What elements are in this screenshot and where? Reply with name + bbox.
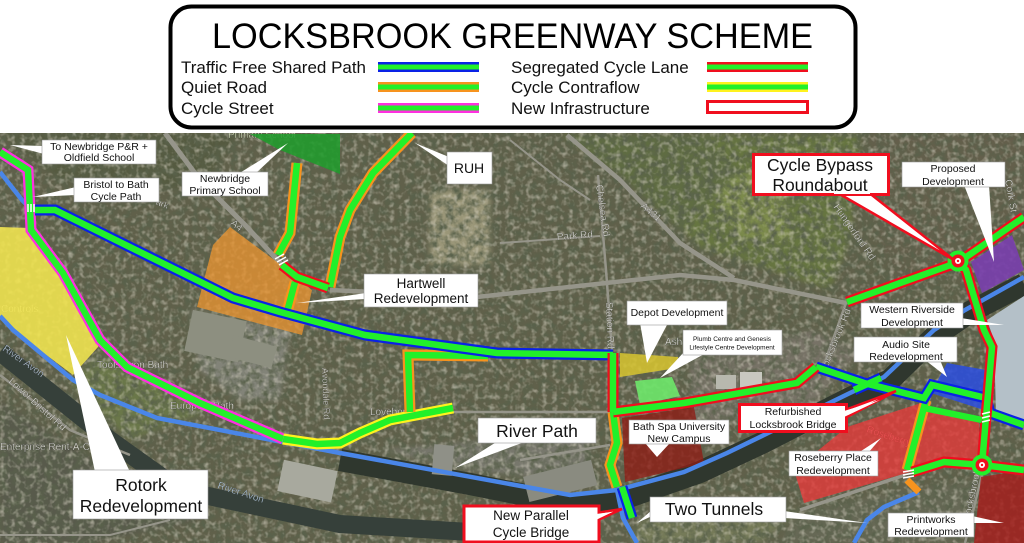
callout: Bristol to Bath Cycle Path: Bristol to Bath xyxy=(83,179,149,191)
callout: Hartwell Redevelopment xyxy=(297,274,478,307)
callout: New Parallel Cycle Bridge: New Parallel xyxy=(493,508,569,523)
legend: right column: Cycle Contraflow xyxy=(511,78,640,97)
callout: Rotork Redevelopment: Redevelopment xyxy=(80,496,202,516)
map place labels: Lymore Park xyxy=(119,183,170,211)
development site: Rotork xyxy=(0,227,100,375)
callout: Bath Spa University New Campus: Bath Spa University xyxy=(633,421,726,433)
callout: Plumb Centre and Genesis Lifestyle Centre Development xyxy=(660,330,782,378)
segregated cycle lane routes xyxy=(282,217,1024,472)
callout: Western Riverside Development xyxy=(861,303,1004,329)
legend: left column: Traffic Free Shared Path xyxy=(181,58,366,77)
callout: Roseberry Place Redevelopment xyxy=(789,438,881,477)
callout: Printworks Redevelopment xyxy=(888,513,1004,538)
map place labels: Toolstation Bath xyxy=(97,360,168,371)
callout: Proposed Development xyxy=(902,162,1005,262)
legend: right column: New Infrastructure xyxy=(511,99,650,118)
cycle contraflow route xyxy=(283,408,453,444)
callout: Printworks Redevelopment: Redevelopment xyxy=(894,526,968,538)
callout: New Parallel Cycle Bridge: Cycle Bridge xyxy=(493,525,569,540)
callout: Hartwell Redevelopment: Redevelopment xyxy=(374,291,469,306)
map place labels: River Avon xyxy=(216,480,265,506)
callout: Depot Development: Depot Development xyxy=(631,307,723,319)
map place labels: Controls xyxy=(1,304,38,315)
development site: Plumb Centre and Genesis xyxy=(635,377,680,405)
callout: Roseberry Place Redevelopment: Redevelopment xyxy=(796,465,870,477)
callout: Bristol to Bath Cycle Path: Cycle Path xyxy=(91,191,142,203)
quiet road routes xyxy=(278,133,926,492)
callout: Western Riverside Development: Development xyxy=(881,317,943,329)
map place labels: Locksbrook Rd xyxy=(962,453,987,521)
icon: cycle bypass roundabout south xyxy=(972,454,992,476)
callout: Proposed Development: Development xyxy=(922,176,984,188)
callout: Cycle Bypass Roundabout xyxy=(754,154,954,260)
development site: Bath Spa University xyxy=(622,407,704,482)
map place labels: River Avon xyxy=(0,343,46,380)
map place labels: Chelsea Rd xyxy=(593,184,611,237)
callout: Audio Site Redevelopment: Audio Site xyxy=(882,339,930,351)
callout: Refurbished Locksbrook Bridge xyxy=(740,391,896,432)
callout: Two Tunnels xyxy=(637,497,867,523)
header strip xyxy=(0,0,1024,133)
icon: cycle bypass roundabout north xyxy=(948,250,968,272)
callout: Cycle Bypass Roundabout: Roundabout xyxy=(772,175,868,195)
callout: Bath Spa University New Campus: New Campus xyxy=(647,433,711,445)
legend: right column xyxy=(511,58,808,118)
callout: Depot Development xyxy=(627,301,727,363)
legend: right column: Segregated Cycle Lane xyxy=(511,58,689,77)
callout: Two Tunnels: Two Tunnels xyxy=(665,499,763,519)
legend: left column: Cycle Street xyxy=(181,99,274,118)
legend: left column: Quiet Road xyxy=(181,78,267,97)
callout: Rotork Redevelopment xyxy=(66,335,208,519)
callout: Hartwell Redevelopment: Hartwell xyxy=(397,276,445,291)
callout: Proposed Development: Proposed xyxy=(931,163,976,175)
callout: To Newbridge P&R + Oldfield School xyxy=(10,140,156,164)
callout: Bristol to Bath Cycle Path xyxy=(33,178,159,203)
callout: Printworks Redevelopment: Printworks xyxy=(906,514,956,526)
map place labels: A4 xyxy=(228,218,245,234)
callout: Bath Spa University New Campus xyxy=(629,420,729,457)
map place labels: Avondale Rd xyxy=(320,368,332,419)
callout: Plumb Centre and Genesis Lifestyle Centre Development: Lifestyle Centre Development xyxy=(689,344,775,352)
callout: RUH: RUH xyxy=(454,160,484,176)
map place labels: Ash xyxy=(665,337,682,348)
development site: Printworks xyxy=(974,470,1024,543)
map place labels: Park Rd xyxy=(556,229,593,243)
map place labels: Locksbrook Rd xyxy=(819,307,854,373)
development site: Hartwell xyxy=(197,227,312,335)
development site: Audio Site xyxy=(931,363,986,410)
callout: Cycle Bypass Roundabout: Cycle Bypass xyxy=(767,155,873,175)
callout: Newbridge Primary School: Primary School xyxy=(189,185,261,197)
callout: Audio Site Redevelopment: Redevelopment xyxy=(869,351,943,363)
development site: Proposed Development xyxy=(971,235,1024,293)
map place labels: Enterprise Rent-A-Car xyxy=(0,442,100,453)
traffic free shared path routes xyxy=(35,210,1024,518)
development site: Newbridge Primary School xyxy=(250,134,340,174)
callout: Newbridge Primary School: Newbridge xyxy=(200,173,250,185)
legend: left column xyxy=(181,58,479,118)
callout: To Newbridge P&R + Oldfield School: To Newbridge P&R + xyxy=(50,141,148,153)
map place labels: Station Rd xyxy=(603,302,616,349)
callout: To Newbridge P&R + Oldfield School: Oldfield School xyxy=(64,152,134,164)
map place labels: Hungerford Rd xyxy=(831,202,877,262)
callout: Western Riverside Development: Western Riverside xyxy=(869,304,955,316)
map place labels: Lower Bristol Rd xyxy=(6,376,68,433)
callout: Refurbished Locksbrook Bridge: Locksbrook Bridge xyxy=(750,419,837,431)
map place labels: A431 xyxy=(638,201,663,225)
title: LOCKSBROOK GREENWAY SCHEME xyxy=(212,16,813,56)
callout: River Path: River Path xyxy=(496,421,578,441)
callout: Roseberry Place Redevelopment: Roseberry Place xyxy=(794,452,872,464)
map place labels: Primary School xyxy=(228,130,296,141)
map place labels: Cork St xyxy=(1002,179,1019,214)
callout: Newbridge Primary School xyxy=(182,143,288,197)
development site: Depot xyxy=(620,353,678,377)
pedestrian crossings xyxy=(28,204,990,478)
satellite map background xyxy=(0,133,1024,543)
river path xyxy=(0,172,1024,543)
callout: Plumb Centre and Genesis Lifestyle Centre Development: Plumb Centre and Genesis xyxy=(693,336,772,343)
panel: title and legend xyxy=(170,6,856,128)
cycle street route xyxy=(0,152,283,439)
map place labels: e Rd xyxy=(440,292,461,303)
callout: Refurbished Locksbrook Bridge: Refurbished xyxy=(765,406,821,418)
map place labels: Lovehoney xyxy=(370,407,419,418)
map place labels: Roseberry xyxy=(865,424,912,449)
map place labels: Europcar Bath xyxy=(170,401,234,412)
callout: RUH xyxy=(415,143,492,184)
callout: Audio Site Redevelopment xyxy=(854,337,957,377)
map place labels xyxy=(0,130,1019,521)
development site: Roseberry Place xyxy=(794,403,979,503)
callout: River Path xyxy=(455,418,596,468)
callout: Rotork Redevelopment: Rotork xyxy=(115,475,167,495)
callout: New Parallel Cycle Bridge xyxy=(464,506,622,542)
